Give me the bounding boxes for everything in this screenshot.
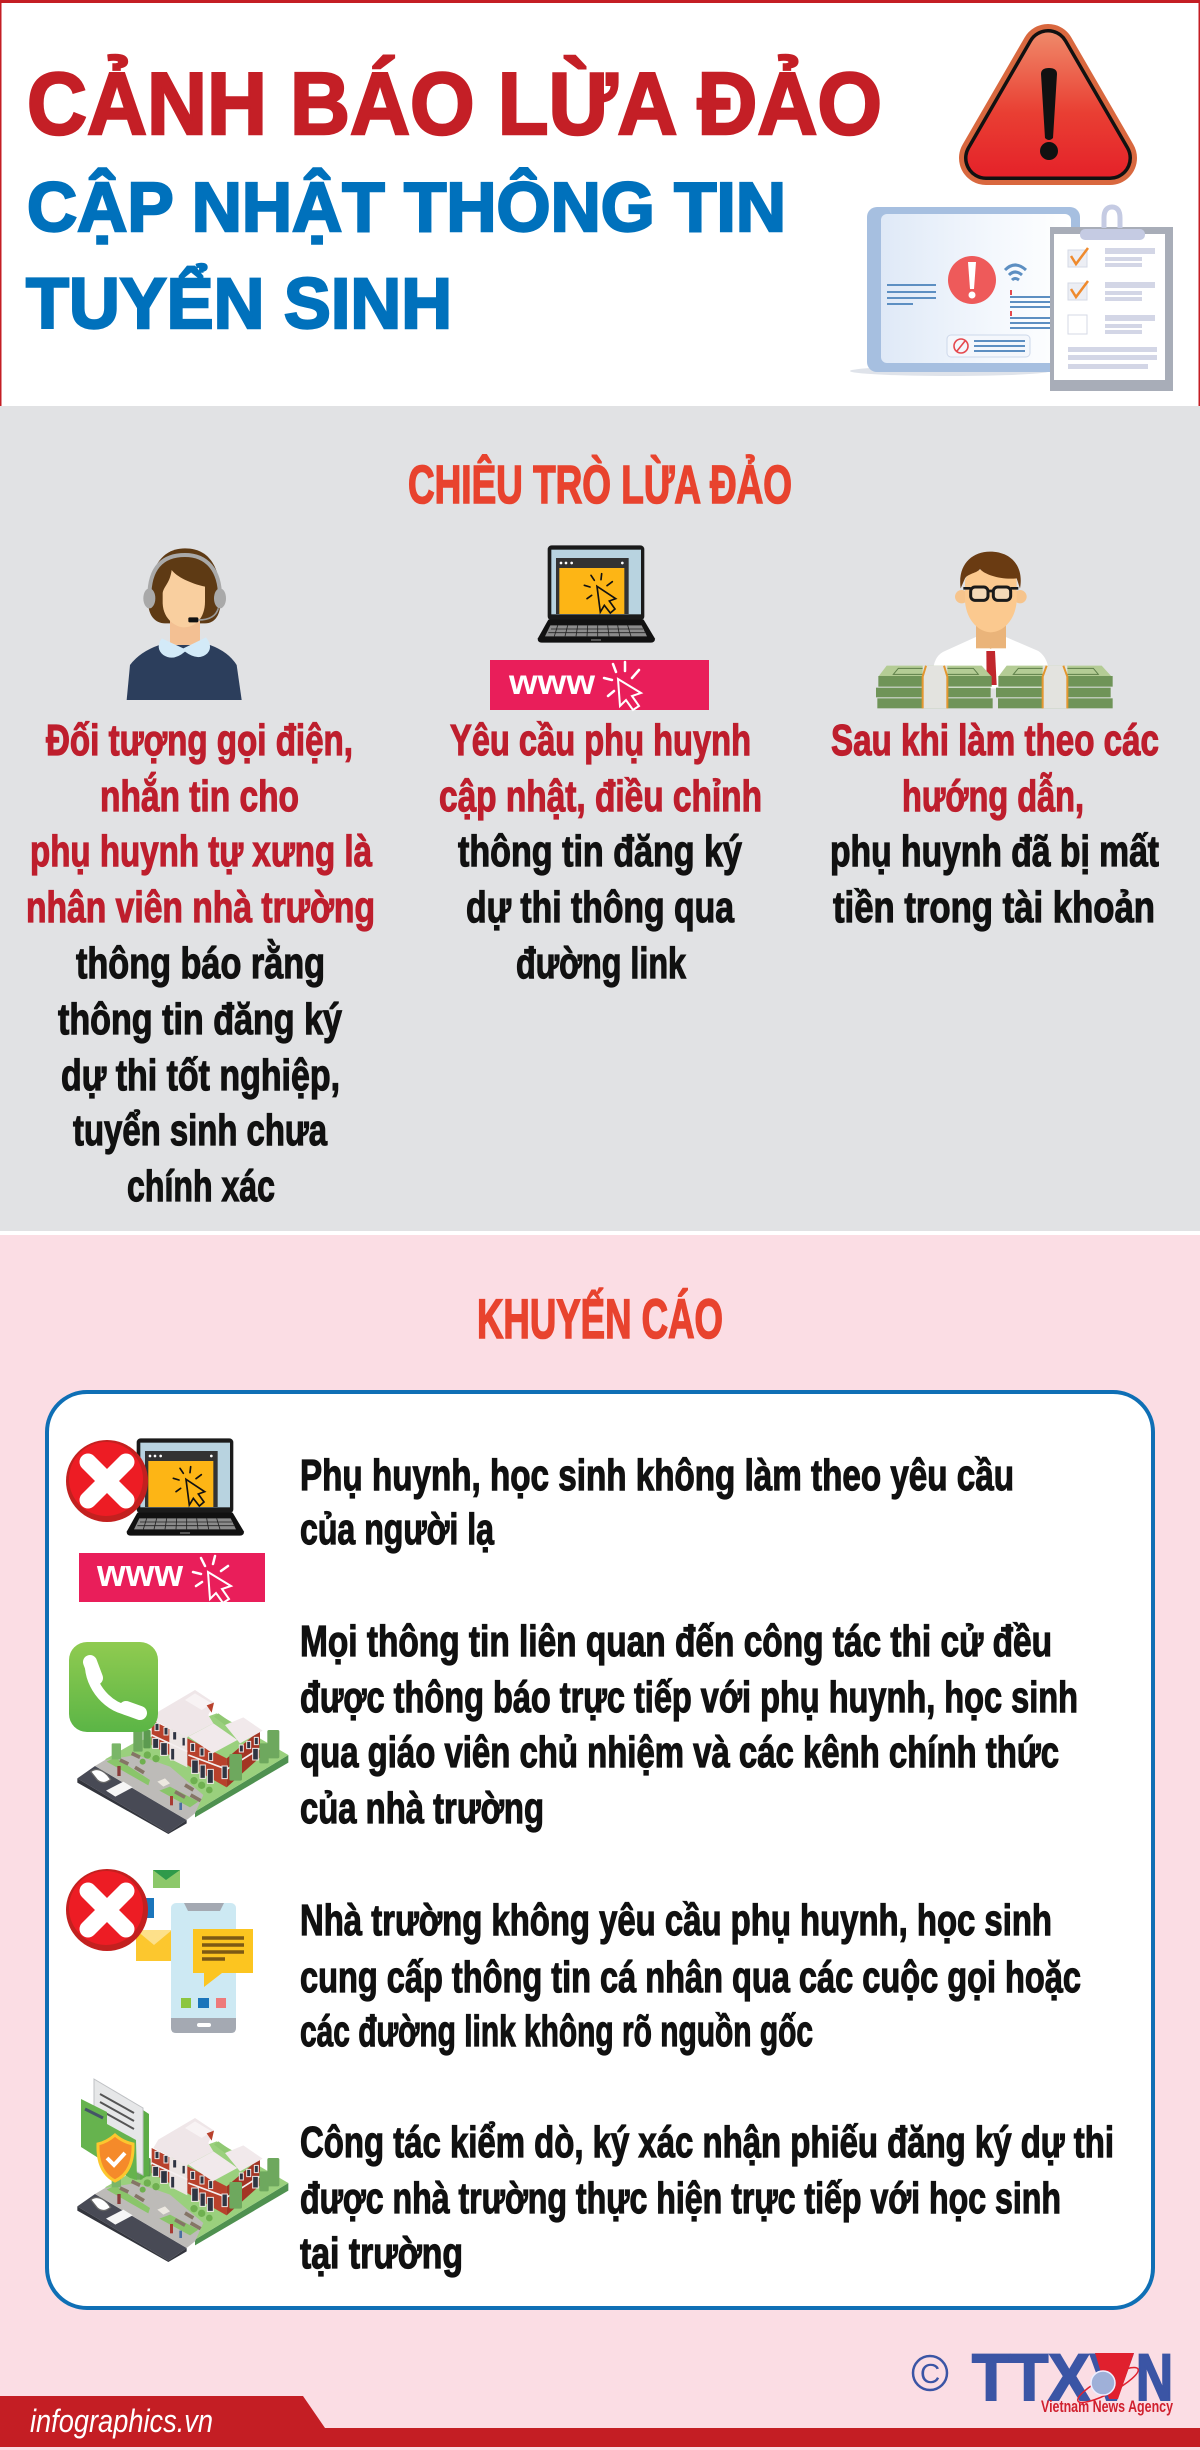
heading: recommendations: KHUYẾN CÁO [477,1287,723,1350]
heading: main title: CẢNH BÁO LỪA ĐẢO [27,54,882,153]
icon: folder, shield and school [77,2079,288,2262]
text: advice 2: của nhà trường [300,1784,544,1833]
text: scam step 1 [26,716,375,1211]
text: scam step 1: dự thi tốt nghiệp, [61,1051,340,1100]
text: advice 4: tại trường [300,2229,463,2278]
logo: TTXVN: V [1090,2340,1133,2414]
text: scam step 2: Yêu cầu phụ huynh [450,716,751,765]
text: scam step 1: Đối tượng gọi điện, [46,716,353,765]
text: scam step 1: thông báo rằng [76,938,325,988]
icon: man behind stacks of money [876,552,1113,708]
logo: TTXVN: N [1136,2340,1173,2414]
text: scam step 2 [439,716,762,988]
text: scam step 1: nhắn tin cho [100,771,299,821]
panel: scam tactics [0,406,1200,1231]
text: scam step 2: cập nhật, điều chỉnh [439,772,762,821]
heading: subtitle: TUYỂN SINH [26,264,452,344]
text: scam step 1: chính xác [127,1162,275,1211]
text: scam step 1: thông tin đăng ký [58,995,342,1044]
text: scam step 1: nhân viên nhà trường [26,883,375,932]
heading: subtitle: CẬP NHẬT THÔNG TIN [27,167,786,246]
logo: TTXVN: TTX [972,2340,1090,2414]
text: advice 1: của người lạ [300,1505,494,1554]
text: advice 3 [300,1896,1081,2056]
heading: subtitle [26,167,786,344]
icon: phone and school [69,1642,288,1834]
icon: laptop with cursor [538,545,655,643]
text: website: infographics.vn [30,2403,213,2439]
icon: call centre agent [127,548,242,700]
icon: warning triangle [986,51,1110,160]
icon: phone messages blocked [66,1869,253,2033]
text: advice 3: các đường link không rõ nguồn gốc [300,2007,813,2056]
text: scam step 1: phụ huynh tự xưng là [30,827,372,876]
logo: TTXVN [913,2340,1173,2416]
icon: do not click link: www [96,1553,183,1595]
text: scam step 2: đường link [516,939,686,988]
icon: clipboard checklist [1050,207,1173,391]
card: recommendation list [47,1392,1153,2308]
icon: www link bar: www [508,663,596,702]
footer bar [0,2396,1200,2447]
text: advice 1 [300,1451,1014,1554]
logo: TTXVN: C [920,2358,940,2389]
text: scam step 3 [830,716,1159,932]
text: advice 4 [300,2118,1114,2278]
text: scam step 3: hướng dẫn, [902,771,1084,821]
icon: do not click link [66,1438,265,1603]
text: scam step 2: thông tin đăng ký [458,827,742,876]
heading: scam tactics: CHIÊU TRÒ LỪA ĐẢO [408,454,792,515]
panel: header [0,0,1200,408]
panel: recommendations [0,1235,1200,2450]
icon: tablet with alert [850,207,1080,376]
icon: www link bar [490,660,709,710]
text: scam step 2: dự thi thông qua [466,883,734,932]
text: advice 2 [300,1617,1078,1833]
text: scam step 1: tuyển sinh chưa [73,1106,327,1155]
